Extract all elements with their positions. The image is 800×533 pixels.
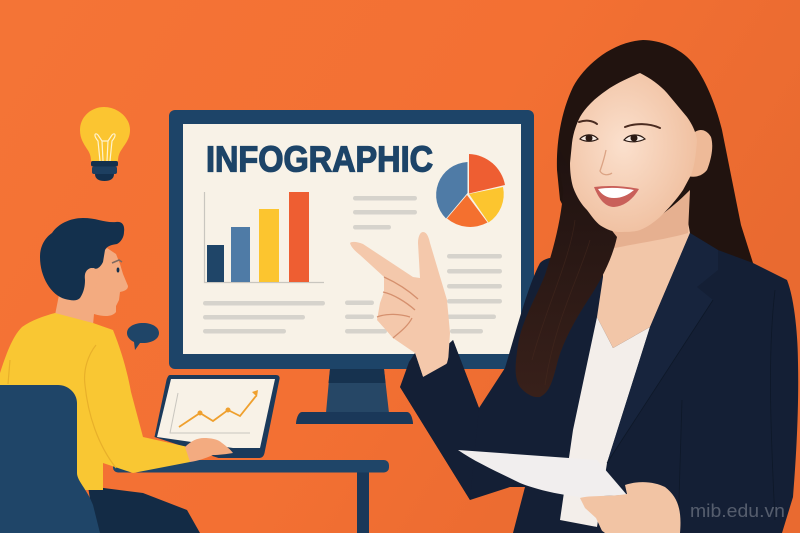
jacket lapel — [607, 233, 718, 463]
text lines: bottom middle — [345, 300, 387, 334]
waist — [561, 523, 605, 533]
monitor stand — [296, 369, 413, 424]
monitor frame — [169, 110, 534, 369]
man eye and brow — [112, 260, 122, 272]
man neck and face — [55, 248, 128, 325]
icon: speech bubble — [127, 323, 159, 350]
seated man — [0, 218, 233, 533]
text lines: upper middle — [353, 196, 417, 230]
monitor screen — [183, 124, 521, 354]
bar chart — [204, 192, 324, 282]
man ear — [85, 268, 99, 288]
shirt — [560, 317, 650, 527]
monitor — [169, 110, 534, 424]
man hair — [40, 218, 124, 300]
screen title: INFOGRAPHIC — [206, 138, 433, 180]
smile — [594, 186, 639, 207]
man hand — [185, 438, 233, 462]
text lines: right — [447, 254, 502, 334]
paper — [458, 450, 627, 497]
left hand pointing — [350, 232, 450, 377]
presenter woman — [350, 40, 798, 533]
ear — [688, 130, 712, 177]
man sweater — [0, 313, 190, 490]
neck and chest — [597, 222, 690, 348]
pie chart — [436, 154, 505, 227]
jacket seams — [607, 290, 775, 533]
right hand — [580, 482, 680, 533]
jacket cuff — [400, 340, 479, 500]
chair — [0, 385, 100, 533]
watermark: mib.edu.vn — [690, 501, 785, 521]
desk — [113, 460, 389, 533]
face — [570, 73, 697, 232]
neck shadow — [603, 190, 690, 250]
hair front — [516, 150, 617, 397]
laptop — [154, 375, 280, 458]
hair strands — [532, 220, 590, 385]
hair back — [557, 40, 753, 300]
man pants — [88, 486, 200, 533]
eyes — [580, 134, 645, 142]
text lines: bottom left — [203, 301, 325, 334]
sweater creases — [8, 345, 116, 468]
laptop screen — [157, 379, 275, 448]
laptop line chart — [170, 390, 258, 433]
nose — [600, 150, 612, 175]
icon: light bulb — [80, 107, 130, 181]
eyebrows — [579, 121, 660, 128]
jacket — [400, 233, 798, 533]
